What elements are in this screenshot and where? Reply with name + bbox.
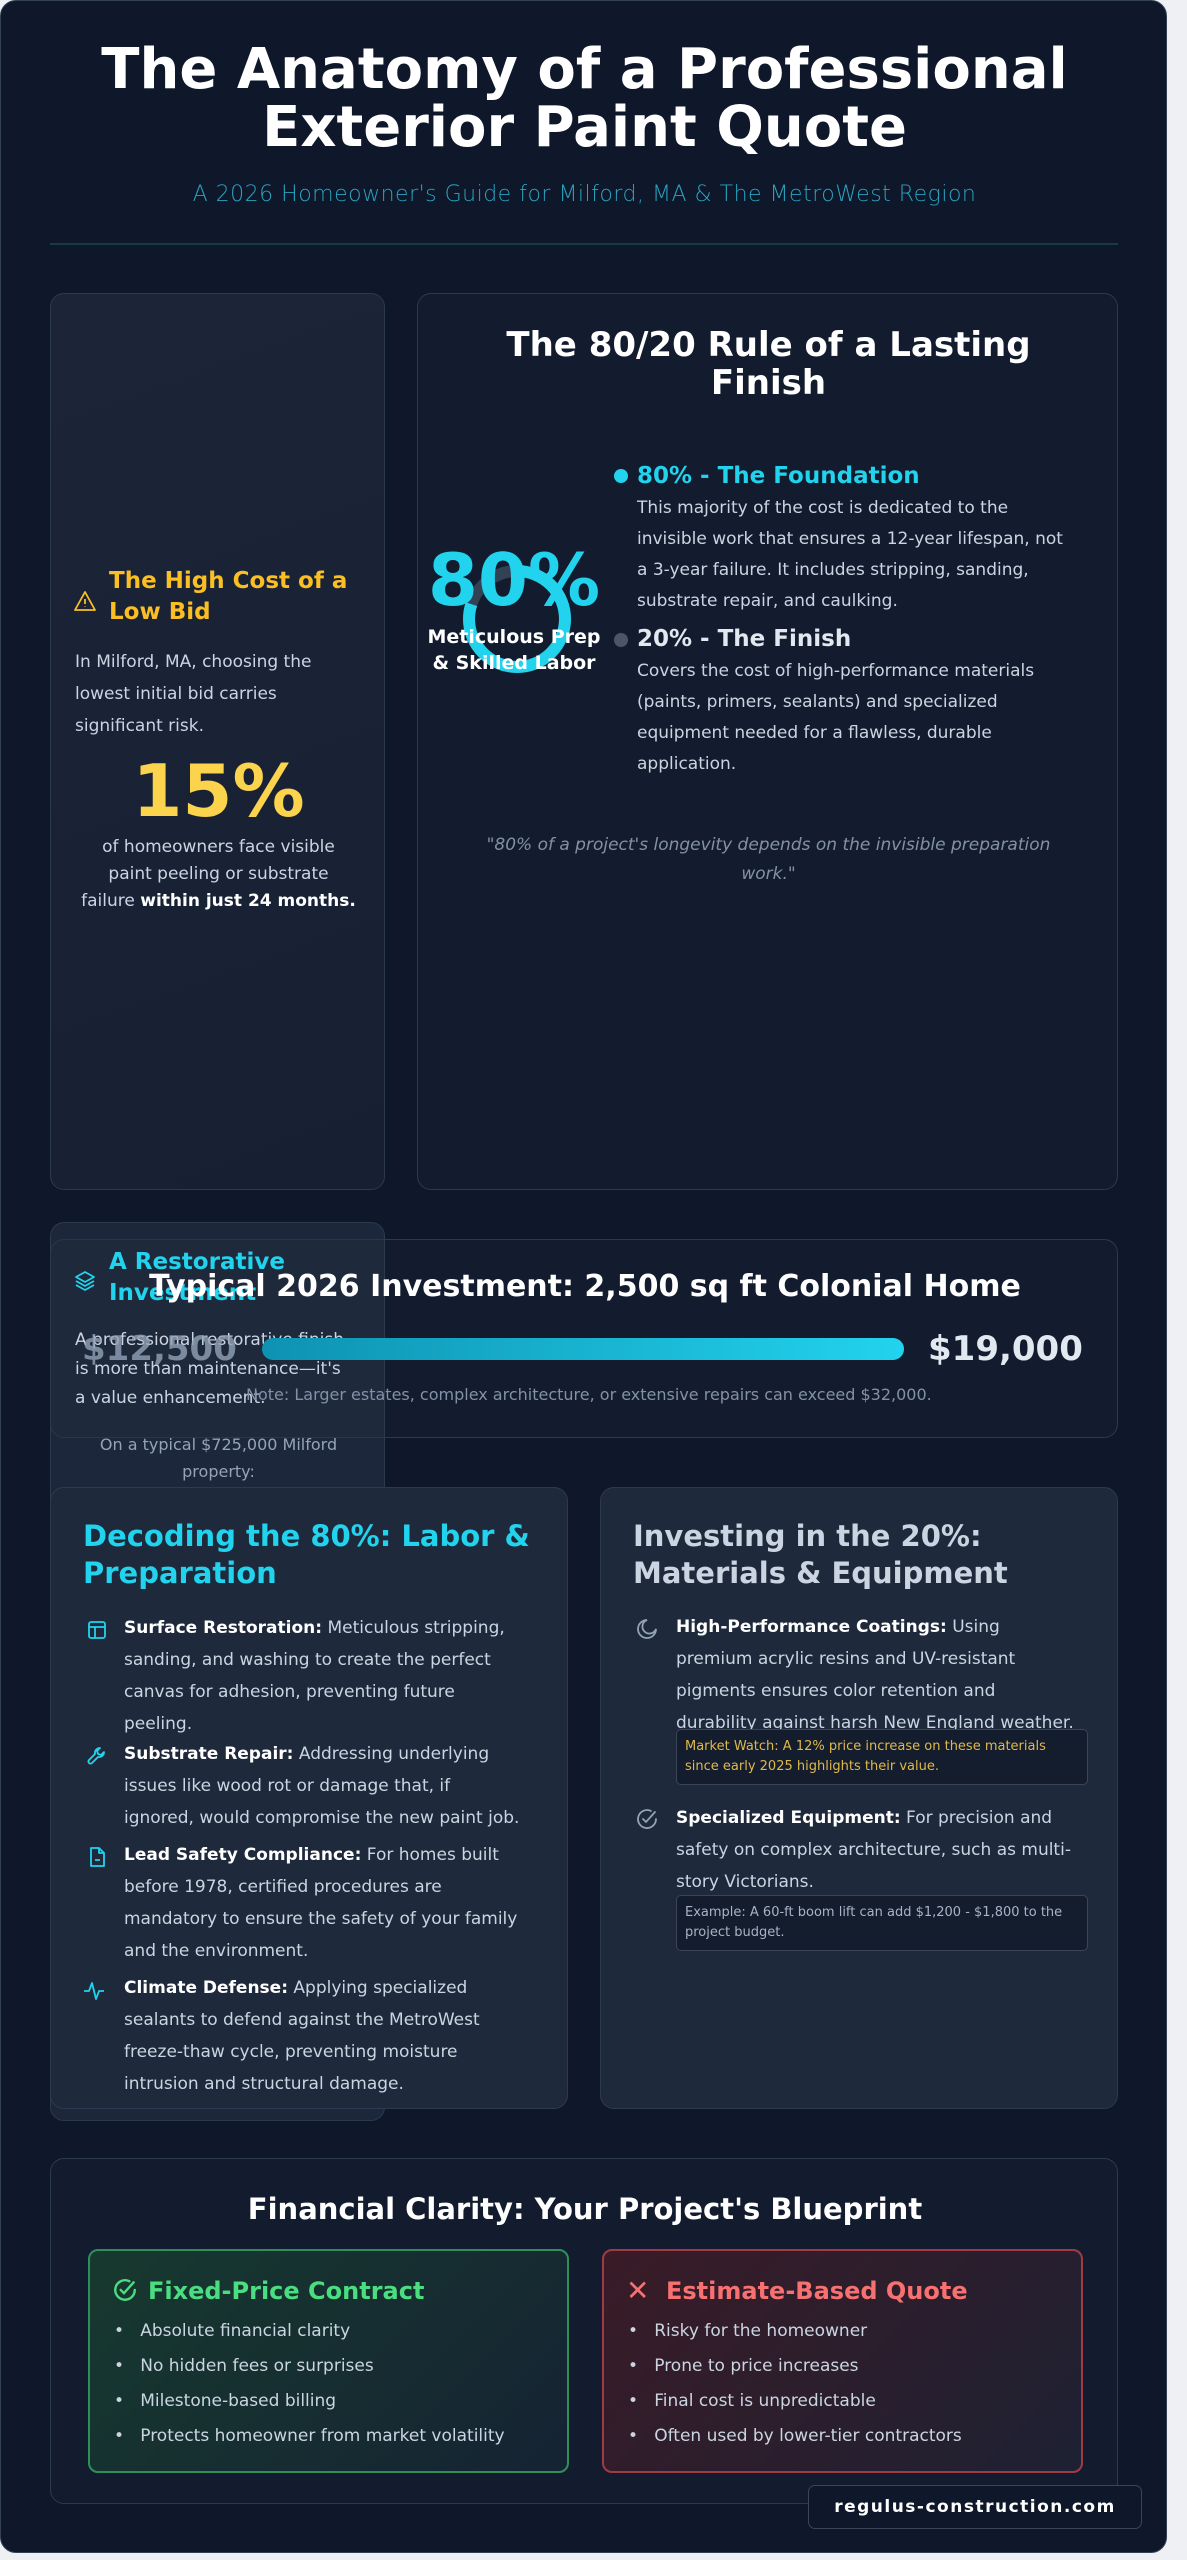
panel: investing in the 20%: High-Performance Coatings: Using — [676, 1617, 1000, 1637]
box: estimate-based: Estimate-Based Quote — [666, 2277, 968, 2305]
panel: investing in the 20% — [600, 1487, 1118, 2109]
panel: decoding the 80%: Climate Defense: Applying specialized sealants to defend against the MetroWest freeze-thaw cycle, preventing moisture intrusion and structural damage. — [124, 1978, 480, 2094]
title: The Anatomy of a Professional — [101, 37, 1068, 102]
quote: "80% of a project's longevity depends on the invisible preparation work." — [487, 835, 1050, 884]
heading: Financial Clarity: Your Project's Blueprint — [248, 2192, 922, 2226]
box: estimate-based: • Prone to price increases — [628, 2356, 859, 2376]
stat caption: paint peeling or substrate — [108, 864, 329, 884]
note: Note: Larger estates, complex architecture, or extensive repairs can exceed $32,000. — [246, 1385, 932, 1404]
range bar: $12,500 — [82, 1329, 237, 1369]
panel: decoding the 80%: Surface Restoration: Meticulous stripping, sanding, and washing to create the perfect canvas for adhesion, preventing future peeling. — [124, 1618, 505, 1734]
item: surface restoration — [88, 1618, 505, 1734]
heading: The 80/20 Rule of a Lasting — [506, 325, 1031, 365]
heading: A Restorative Investment — [109, 1249, 285, 1306]
legend: finish — [614, 626, 1034, 774]
box: estimate-based: • Often used by lower-tier contractors — [628, 2426, 962, 2446]
stat caption — [81, 837, 356, 911]
panel: 80/20 rule: 80% - The Foundation — [637, 463, 920, 489]
heading — [506, 325, 1031, 403]
text block: A professional restorative finish is more than maintenance—it's a value enhancement. — [75, 1330, 344, 1408]
heading: Decoding the 80%: Labor & Preparation — [83, 1519, 530, 1590]
panel: 80/20 rule: This majority of the cost is dedicated to the invisible work that ensures a 12-year lifespan, not a 3-year failure. It includes stripping, sanding, substrate repair, and caulking. — [637, 498, 1063, 611]
heading: Investing in the 20%: Materials & Equipment — [633, 1519, 1008, 1590]
panel: restorative investment — [50, 1222, 385, 2121]
panel: decoding the 80%: Substrate Repair: Addressing underlying issues like wood rot or damage that, if ignored, would compromise the new paint job. — [124, 1744, 519, 1828]
box: estimate-based: • Final cost is unpredictable — [628, 2391, 876, 2411]
icon: layers — [75, 1271, 95, 1291]
panel: high cost of low bid — [50, 293, 385, 1190]
title — [101, 37, 1068, 160]
panel: financial clarity — [50, 2158, 1118, 2504]
panel: 80/20 rule: 20% - The Finish — [637, 626, 851, 652]
panel: decoding the 80% — [50, 1487, 568, 2109]
stat caption: of homeowners face visible — [102, 837, 335, 857]
panel: 80/20 rule: Covers the cost of high-performance materials (paints, primers, sealants) and specialized equipment needed for a flawless, durable application. — [637, 661, 1034, 774]
box: fixed-price: • Milestone-based billing — [114, 2391, 336, 2411]
panel: investing in the 20%: durability against harsh New England weather. — [676, 1713, 1074, 1733]
heading: Finish — [711, 363, 826, 403]
callout: market watch: Market Watch: A 12% price increase on these materials since early 2025 highlights their value. — [685, 1739, 1046, 1774]
panel: decoding the 80%: Lead Safety Compliance: For homes built before 1978, certified procedures are mandatory to ensure the safety of your family and the environment. — [124, 1845, 517, 1961]
footer badge: regulus-construction.com — [834, 2497, 1116, 2517]
panel: investing in the 20%: safety on complex architecture, such as multi- — [676, 1840, 1071, 1860]
range bar: $19,000 — [928, 1329, 1083, 1369]
footer badge — [808, 2485, 1142, 2529]
box: estimate-based: • Risky for the homeowner — [628, 2321, 867, 2341]
item: coatings — [637, 1617, 1074, 1733]
callout: example: Example: A 60-ft boom lift can add $1,200 - $1,800 to the project budget. — [685, 1905, 1062, 1940]
stat caption: failure within just 24 months. — [81, 891, 356, 911]
box: fixed-price: • No hidden fees or surprises — [114, 2356, 374, 2376]
text block: In Milford, MA, choosing the lowest initial bid carries significant risk. — [75, 652, 311, 736]
callout: example — [676, 1895, 1088, 1951]
heading: Typical 2026 Investment: 2,500 sq ft Colonial Home — [149, 1269, 1021, 1304]
donut chart — [428, 538, 600, 674]
caption: On a typical $725,000 Milford property: — [100, 1435, 337, 1481]
legend: foundation — [614, 463, 1063, 611]
investment content — [82, 1269, 1083, 1404]
range bar — [82, 1329, 1083, 1369]
box: fixed-price: Fixed-Price Contract — [148, 2277, 424, 2305]
panel: 80/20 rule — [417, 293, 1118, 1190]
box: fixed-price: • Absolute financial clarity — [114, 2321, 350, 2341]
panel: investing in the 20%: premium acrylic resins and UV-resistant — [676, 1649, 1015, 1669]
icon: warning — [74, 591, 96, 611]
item: lead safety — [90, 1845, 517, 1961]
item: substrate repair — [88, 1744, 519, 1828]
stat: 15%: 15% — [132, 749, 305, 833]
donut chart: & Skilled Labor — [432, 652, 596, 674]
panel: investing in the 20%: Specialized Equipment: For precision and — [676, 1808, 1052, 1828]
callout: market watch — [676, 1729, 1088, 1785]
box: fixed-price: • Protects homeowner from market volatility — [114, 2426, 505, 2446]
donut chart: Meticulous Prep — [428, 626, 600, 648]
item: climate defense — [84, 1978, 480, 2094]
title: Exterior Paint Quote — [262, 95, 907, 160]
icon: x: ✕ — [626, 2274, 649, 2307]
panel: investing in the 20%: pigments ensures color retention and — [676, 1681, 995, 1701]
panel: investment (background) — [50, 1239, 1118, 1438]
panel: investing in the 20%: story Victorians. — [676, 1872, 814, 1892]
icon: check — [114, 2279, 136, 2301]
subtitle: A 2026 Homeowner's Guide for Milford, MA & The MetroWest Region — [193, 182, 976, 207]
heading: The High Cost of a Low Bid — [109, 568, 347, 625]
donut chart: 80% — [428, 538, 600, 622]
box: fixed-price — [88, 2249, 569, 2473]
box: estimate-based — [602, 2249, 1083, 2473]
item: equipment — [637, 1808, 1071, 1892]
